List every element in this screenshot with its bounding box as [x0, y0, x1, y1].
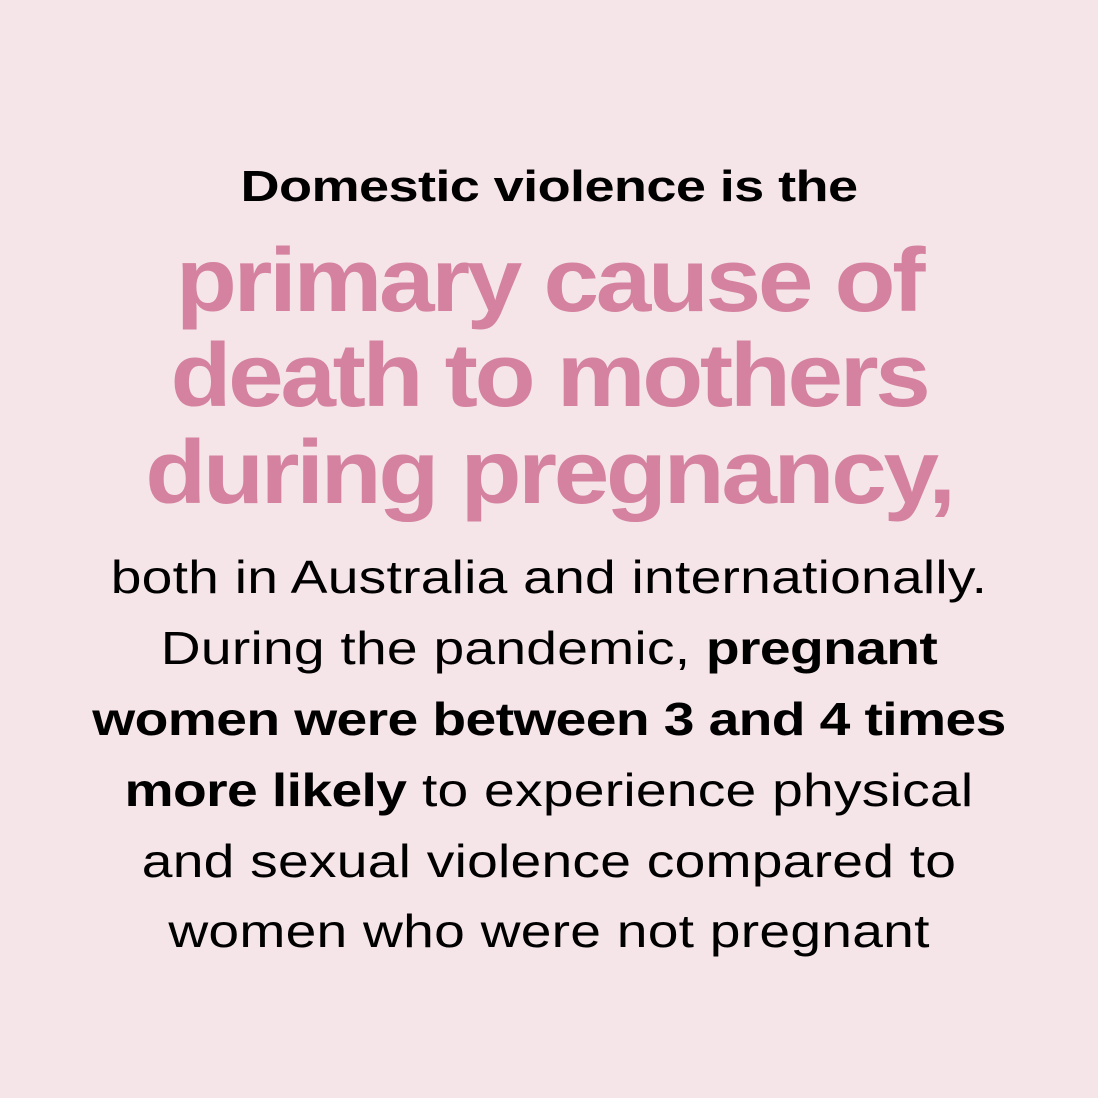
body text: During the pandemic, pregnant — [161, 622, 937, 674]
body text — [92, 551, 1006, 957]
pink headline — [145, 231, 953, 523]
body text: women who were not pregnant — [168, 905, 930, 957]
pink headline: during pregnancy, — [145, 423, 953, 523]
body text: more likely to experience physical — [125, 764, 973, 816]
heading: Domestic violence is the — [241, 162, 857, 211]
pink headline: primary cause of — [176, 231, 922, 331]
body text: women were between 3 and 4 times — [92, 693, 1006, 745]
pink headline: death to mothers — [170, 326, 928, 426]
body text: and sexual violence compared to — [142, 835, 956, 887]
body text: both in Australia and internationally. — [111, 551, 987, 603]
